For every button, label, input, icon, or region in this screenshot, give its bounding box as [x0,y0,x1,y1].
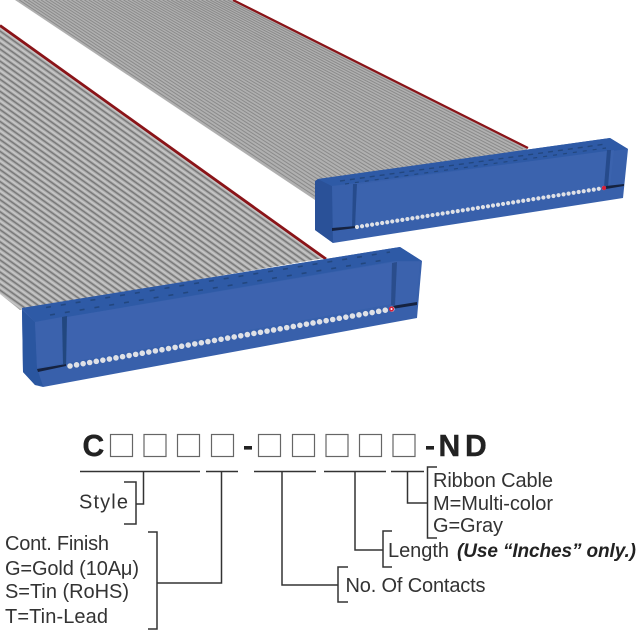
front ribbon cable [0,25,326,310]
part number code [82,429,487,463]
front connector [22,247,422,387]
number of contacts callout: No. Of Contacts [346,575,486,597]
part number code: D [465,429,487,463]
contact finish callout: S=Tin (RoHS) [5,581,129,603]
ribbon cable colour callout [408,467,553,538]
back ribbon cable [15,0,528,200]
style callout [79,472,144,524]
ribbon cable colour callout: M=Multi-color [433,493,553,515]
back connector contact row [357,186,606,227]
contact finish callout [5,472,222,629]
style callout: Style [79,492,128,514]
number of contacts callout [282,472,486,602]
part number code: C [82,429,104,463]
contact finish callout: G=Gold (10Aμ) [5,558,139,580]
ribbon cable colour callout: Ribbon Cable [433,470,553,492]
code underlines [80,470,424,472]
contact finish callout: Cont. Finish [5,533,109,555]
length callout: (Use “Inches” only.) [457,541,636,562]
ribbon cable colour callout: G=Gray [433,515,503,537]
back connector [315,138,628,243]
front connector contact row [70,306,394,366]
part number code: N [438,429,460,463]
length callout [355,472,636,567]
length callout: Length [388,540,449,562]
contact finish callout: T=Tin-Lead [5,606,108,628]
